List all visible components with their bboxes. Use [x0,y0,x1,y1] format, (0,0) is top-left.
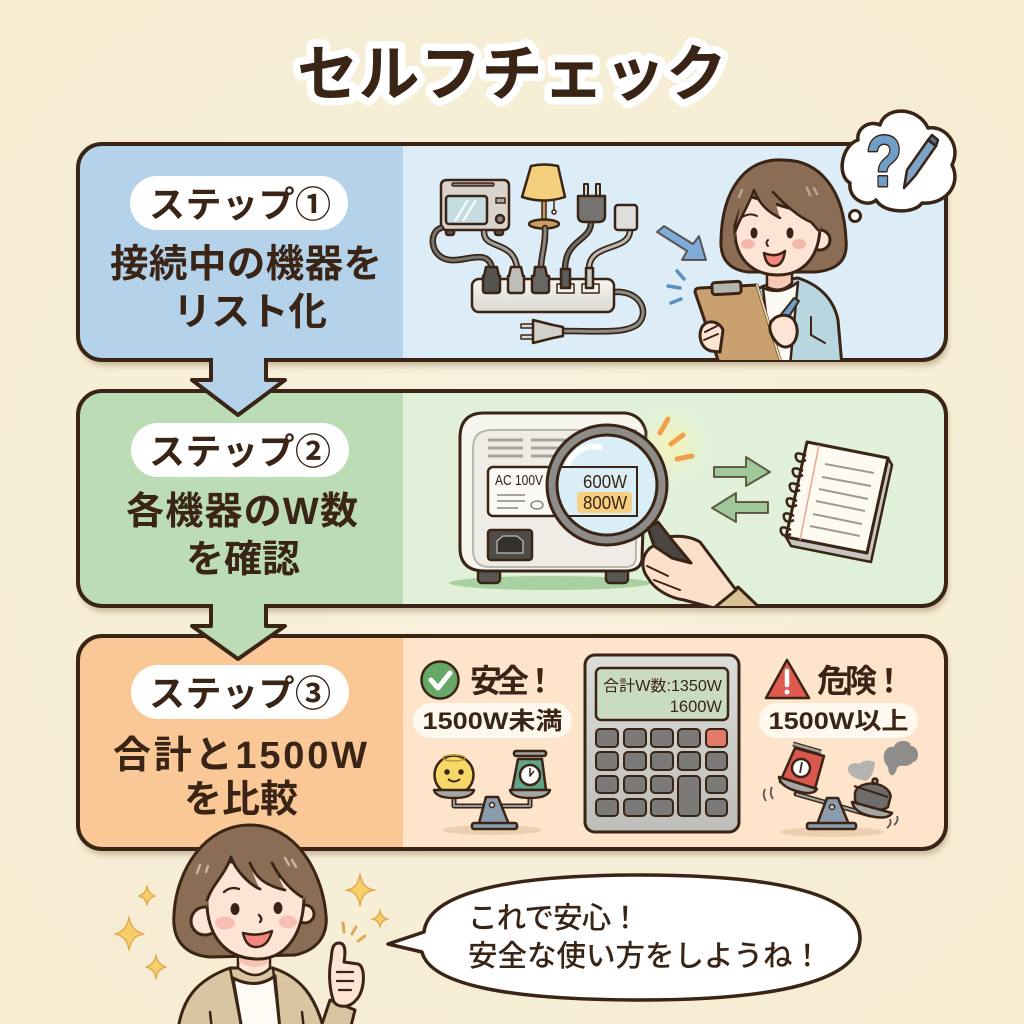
safe label: 安全！ [470,663,556,699]
magnifier: 800W [583,492,627,513]
step 2 heading: 各機器のW数 [126,491,358,533]
step 3 badge [131,665,349,719]
icon: ac adapter [615,205,637,230]
clipboard [695,285,782,366]
arrow: to notebook [714,457,770,486]
bubble text: これで安心！ [468,902,640,935]
safe label: 1500W未満 [422,708,562,735]
hair [721,160,846,272]
step 1 heading: 接続中の機器を [110,243,382,286]
arrow: step 2 to 3 [192,604,285,659]
hand holding magnifier [643,522,760,608]
panel: step 1 [78,144,948,366]
speech bubble [388,875,860,1000]
icon: power strip [472,267,614,312]
step 1 badge [130,176,348,230]
step 2 badge: ステップ② [149,431,331,472]
icon: mains plug [521,320,563,343]
step 2 heading: を確認 [186,539,300,581]
icon: microwave [441,180,509,235]
balance: safe [434,751,550,835]
icon: table lamp [522,164,565,228]
danger label: 1500W以上 [768,708,908,735]
magnifier: 600W [583,471,627,492]
thumb motion lines [343,923,365,941]
device with rating label [449,413,651,590]
notice dashes [668,271,684,303]
icon: notebook [781,442,892,562]
calculator [585,655,739,832]
step 1 heading: リスト化 [173,291,327,334]
bubble text: 安全な使い方をしようね！ [468,940,822,973]
arrow: from notebook [712,493,768,522]
hand thumbs up [320,1000,355,1024]
step 3 badge: ステップ③ [149,673,331,714]
thought bubble [842,111,955,222]
danger label [759,660,918,738]
sparkle rays [650,419,694,467]
title: セルフチェック [297,40,727,108]
arrow: step 1 to 2 [192,358,285,415]
panel: step 2 [78,391,948,612]
icon: pen [904,135,938,188]
icon: warning triangle [766,660,809,698]
person with clipboard [695,160,846,366]
icon: wall plug [578,184,605,222]
jacket [178,968,324,1024]
closing character [174,825,363,1024]
panel: step 3 [78,636,948,855]
arrow: devices to person [657,226,706,260]
icon: check mark [422,662,458,698]
step 3 heading: を比較 [184,779,298,821]
step 2 badge [131,423,349,477]
panel: step 2: AC 100V [495,473,543,489]
calculator: 1600W [670,698,722,716]
step 1 badge: ステップ① [149,184,331,225]
danger label: 危険！ [817,663,905,699]
sparkles [115,874,388,979]
step 3 heading: 合計と1500W [113,735,367,777]
magnifier [547,425,667,545]
balance: danger [764,741,918,837]
hair [174,825,326,957]
safe label [413,662,572,738]
calculator: 合計W数:1350W [603,677,722,695]
icon: power cords [433,222,643,331]
icon: question mark: ? [866,122,902,202]
